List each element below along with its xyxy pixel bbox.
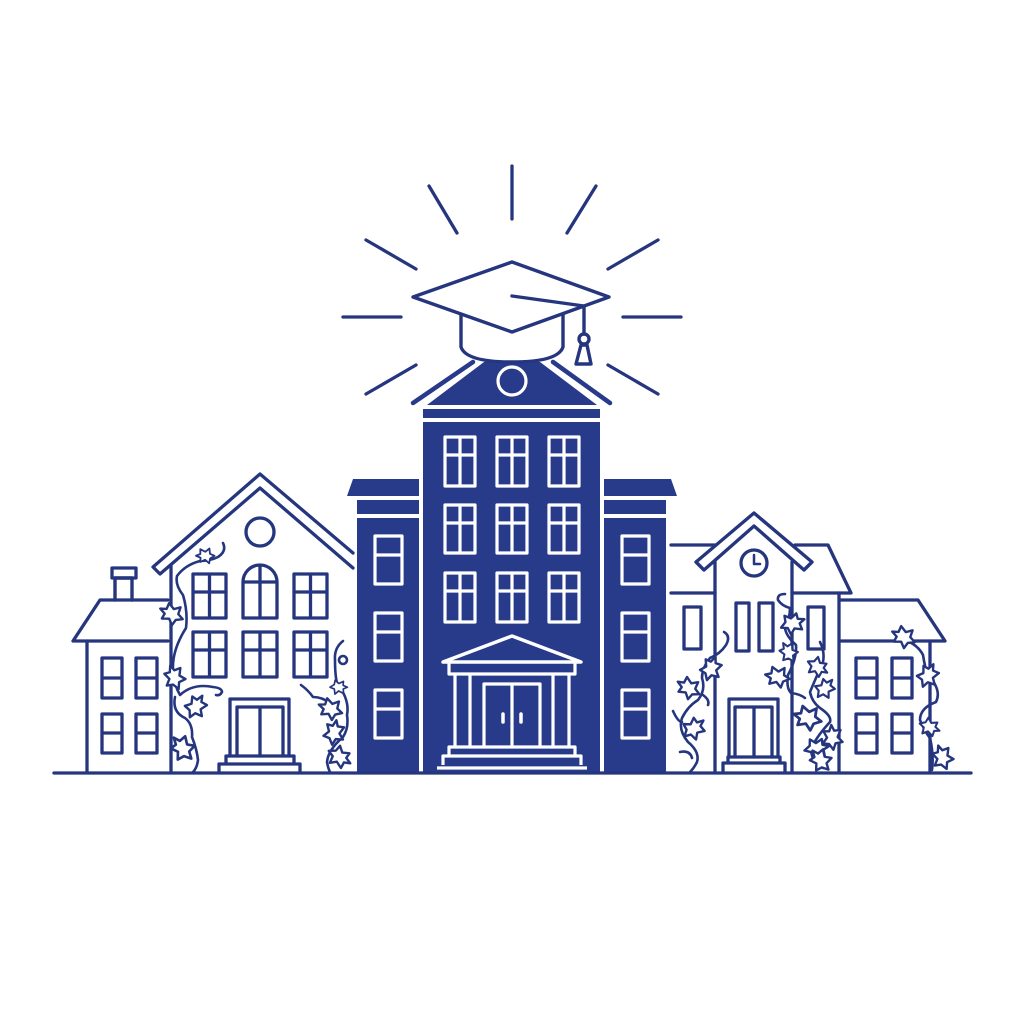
- ivy: left house main vine: [158, 543, 224, 772]
- ivy: left house right vine: [301, 641, 352, 772]
- gable roof: [153, 474, 353, 574]
- back roof: [671, 545, 851, 593]
- outer roof lines: [413, 362, 610, 403]
- clock: [741, 550, 767, 576]
- tower gable: [696, 513, 812, 570]
- columned portico entrance: [437, 636, 587, 768]
- windows: [856, 658, 912, 698]
- narrow windows: [684, 603, 824, 651]
- tower walls: [715, 562, 792, 772]
- icon: graduation cap: [413, 262, 609, 364]
- pediment round window: [498, 367, 526, 395]
- cap base: [461, 312, 563, 362]
- building: right clock tower house: [671, 513, 851, 772]
- roof: [841, 600, 945, 641]
- mortarboard: [413, 262, 609, 332]
- ground line: [54, 771, 971, 775]
- tower body and pediment: [423, 362, 600, 772]
- tower windows: [445, 437, 579, 622]
- building: left gabled house: [153, 474, 353, 772]
- door and steps: [729, 699, 778, 757]
- round attic window: [246, 518, 274, 546]
- walls and windows: [87, 641, 157, 772]
- ivy: right house vine: [890, 624, 957, 772]
- roof and chimney: [73, 568, 168, 641]
- building: central blue tower: [347, 362, 677, 772]
- strap and tassel: [512, 296, 591, 364]
- upper windows: [193, 574, 226, 618]
- wing windows: [375, 536, 649, 738]
- walls: [928, 641, 932, 772]
- icon: radiating light rays: [343, 166, 681, 394]
- wing roofs and bodies: [347, 479, 677, 772]
- building: small right house: [841, 600, 945, 772]
- ivy: right tower left vine: [673, 632, 728, 772]
- door and steps: [230, 699, 289, 756]
- ivy: right tower centre vine: [763, 594, 808, 698]
- lower windows: [193, 632, 226, 677]
- ivy: right tower outer vine: [791, 642, 848, 773]
- building: small left house: [73, 568, 168, 772]
